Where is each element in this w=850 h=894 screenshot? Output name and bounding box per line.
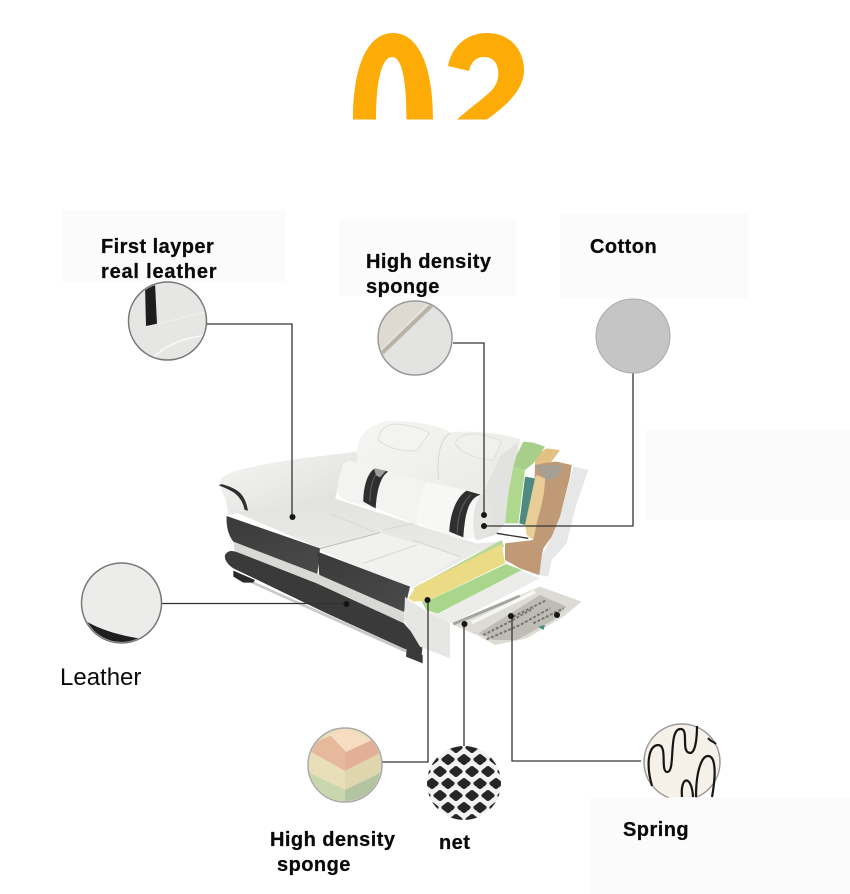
label: leather: Leather: [60, 664, 141, 691]
label: high density sponge top: sponge: [366, 276, 440, 298]
circle: net: [427, 746, 501, 820]
sofa: lumbar pillows: [337, 461, 493, 540]
callout dots: [290, 512, 560, 627]
sofa: cutaway side frame: [404, 467, 588, 658]
circle: spring: [644, 724, 720, 800]
label: high density sponge bottom: High density: [270, 829, 396, 851]
circle: cotton: [596, 299, 670, 373]
circle: first layer real leather: [128, 282, 210, 360]
label: spring: Spring: [623, 819, 689, 841]
sofa cutaway illustration: [220, 421, 588, 663]
title number 02: [353, 33, 524, 120]
cutaway: brown wood and cotton layers: [505, 448, 572, 575]
sofa: black front panels: [227, 516, 410, 612]
circle: layered sponge: [308, 728, 382, 802]
circle: leather: [82, 563, 162, 650]
sofa: seat cushions: [237, 499, 502, 588]
cutaway: spring and net bed: [452, 587, 582, 645]
label: high density sponge top: High density: [366, 251, 492, 273]
label: first layer real leather: First layper: [101, 236, 214, 258]
label: net: net: [439, 832, 470, 854]
label: first layer real leather: real leather: [101, 261, 217, 283]
label: high density sponge bottom: sponge: [277, 854, 351, 876]
cutaway: green foam and blue fill: [497, 442, 545, 538]
sofa: armrest: [220, 452, 357, 515]
label: cotton: Cotton: [590, 236, 657, 258]
sofa: base rails and feet: [225, 542, 423, 663]
sofa: back cushions: [347, 421, 521, 540]
circle: high density sponge top: [378, 301, 452, 375]
callout lines: [160, 324, 641, 762]
cutaway: yellow and green seat foam: [408, 540, 522, 613]
faint background panels: [62, 210, 850, 894]
